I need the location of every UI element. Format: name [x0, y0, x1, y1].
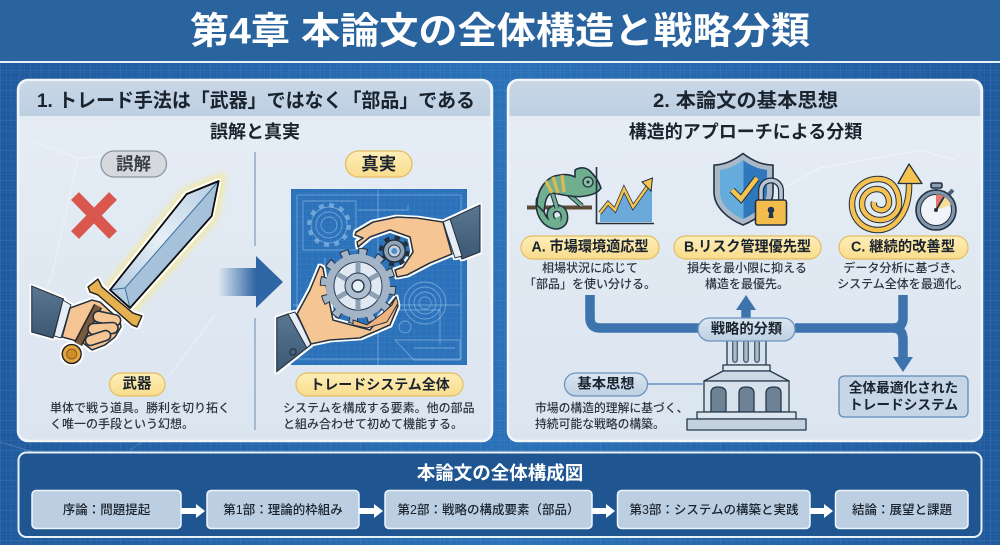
small gear: [382, 238, 407, 264]
label: weapon: [110, 373, 165, 396]
badge: basic philosophy: 基本思想: [577, 374, 635, 392]
label: type B: [674, 236, 821, 259]
right panel heading: 2. 本論文の基本思想: [653, 89, 838, 112]
right panel subtitle: 構造的アプローチによる分類: [629, 122, 862, 142]
text: type C description: [837, 260, 969, 291]
text: type C description: システム全体を最適化。: [837, 276, 969, 291]
arrow: misconception to truth: [218, 256, 283, 308]
label: type C: [839, 236, 968, 259]
icon: red cross: [75, 196, 113, 235]
text: parts description: システムを構成する要素。他の部品: [283, 400, 475, 415]
step: part 1: 第1部：理論的枠組み: [223, 502, 343, 517]
badge: strategic classification: 戦略的分類: [711, 320, 783, 338]
text: parts description: [283, 400, 475, 431]
title banner: [0, 0, 1000, 63]
text: type B description: 構造を最優先。: [705, 276, 789, 291]
label: type A: A. 市場環境適応型: [532, 238, 648, 256]
step: part 3: 第3部：システムの構築と実践: [629, 502, 799, 517]
step: part 3: [618, 490, 810, 528]
step: conclusion: [836, 490, 968, 528]
left panel subtitle: 誤解と真実: [210, 122, 300, 142]
flow arrows: [590, 295, 903, 358]
step: introduction: 序論：問題提起: [63, 502, 151, 517]
label: whole trading system: [296, 373, 463, 396]
box: optimized trading system: 全体最適化された: [849, 380, 958, 396]
upper hand: [355, 205, 480, 277]
label: weapon: 武器: [122, 376, 152, 392]
badge: basic philosophy: [564, 373, 704, 396]
structure heading: 本論文の全体構成図: [417, 462, 583, 484]
text: type A description: [524, 260, 656, 291]
text: weapon description: く唯一の手段という幻想。: [50, 416, 194, 431]
badge: misconception: 誤解: [116, 154, 151, 174]
left panel heading: 1. トレード手法は「武器」ではなく「部品」である: [37, 90, 475, 112]
panel: overall structure: [18, 452, 982, 537]
text: weapon description: [50, 400, 230, 431]
panel: left, weapon vs parts: [18, 80, 492, 441]
text: parts description: と組み合わせて初めて機能する。: [283, 416, 463, 431]
arrow: [810, 504, 833, 518]
text: philosophy description: 市場の構造的理解に基づく、: [535, 401, 688, 415]
step: introduction: [32, 490, 181, 528]
label: whole trading system: トレードシステム全体: [310, 376, 450, 392]
text: type B description: [687, 260, 807, 291]
icon: chameleon and chart: [527, 167, 654, 226]
icon: spiral arrow and stopwatch: [852, 164, 956, 230]
step: part 2: [385, 490, 592, 528]
box: optimized trading system: トレードシステム: [849, 398, 958, 412]
label: type C: C. 継続的改善型: [851, 238, 955, 256]
illustration: blueprint with gears and hands: [277, 189, 480, 372]
icon: sword in hand: [32, 181, 219, 364]
title: 第4章 本論文の全体構造と戦略分類: [190, 10, 810, 52]
text: philosophy description: 持続可能な戦略の構築。: [535, 417, 665, 431]
large gear: [325, 253, 398, 328]
text: type C description: データ分析に基づき、: [843, 260, 963, 275]
label: type A: [521, 236, 659, 259]
icon: temple: [687, 340, 806, 430]
icon: shield and padlock: [714, 154, 786, 225]
text: type B description: 損失を最小限に抑える: [687, 260, 807, 275]
badge: truth: 真実: [361, 154, 396, 174]
text: type A description: 相場状況に応じて: [542, 260, 638, 275]
badge: truth: [346, 151, 412, 177]
step: conclusion: 結論：展望と課題: [852, 502, 952, 517]
arrow: [592, 504, 615, 518]
badge: strategic classification: [698, 318, 795, 341]
badge: misconception: [101, 151, 166, 177]
arrow: [181, 504, 205, 518]
box: optimized trading system: [839, 376, 968, 417]
text: weapon description: 単体で戦う道具。勝利を切り拓く: [50, 400, 230, 415]
label: type B: B.リスク管理優先型: [684, 238, 811, 256]
arrow heads: [736, 295, 913, 372]
text: philosophy description: [535, 401, 688, 431]
text: type A description: 「部品」を使い分ける。: [524, 276, 656, 291]
panel: right, basic philosophy: [508, 80, 982, 441]
step: part 1: [207, 490, 359, 528]
step: part 2: 第2部：戦略の構成要素（部品）: [398, 502, 579, 517]
arrow: [359, 504, 383, 518]
lower hand: [277, 266, 398, 372]
